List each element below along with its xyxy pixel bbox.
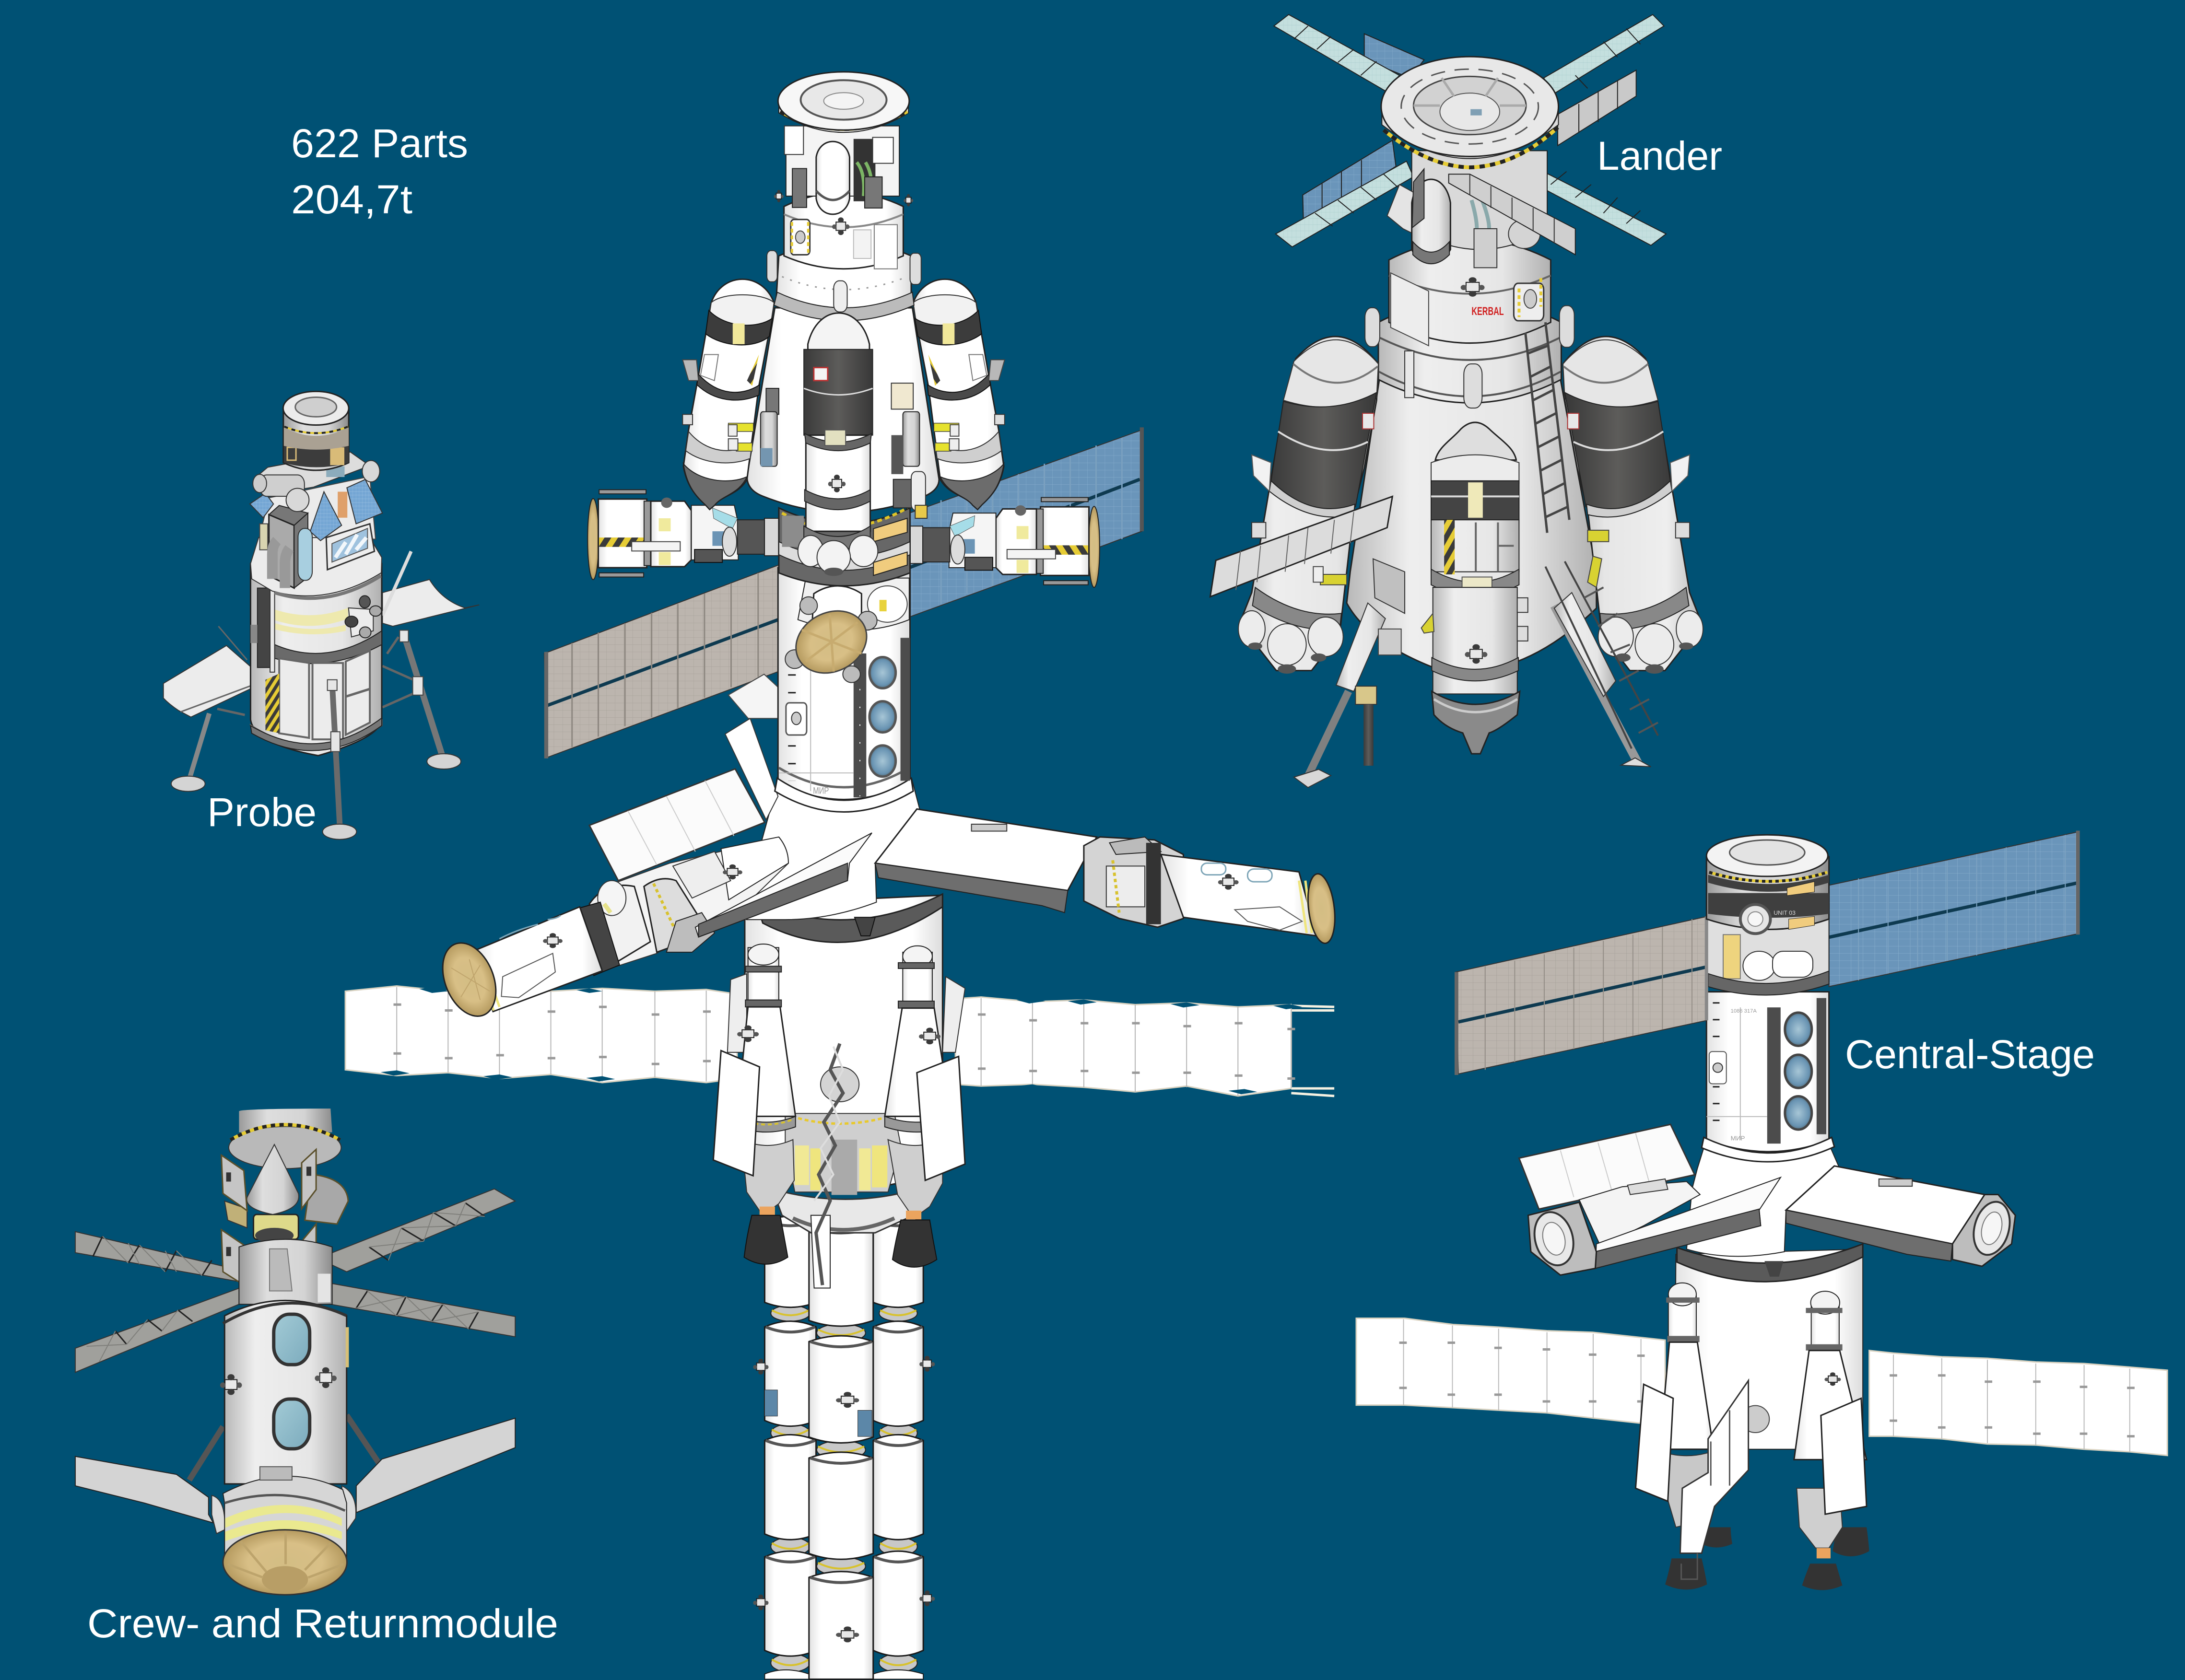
cone hull (1347, 374, 1597, 671)
gray folded panel (1210, 496, 1392, 597)
central column: МИР (1731, 1135, 1745, 1142)
side docking port (1741, 1406, 1769, 1433)
upper stack (224, 1108, 348, 1243)
side panel left (713, 1050, 760, 1176)
dark collar ring (756, 894, 942, 942)
truss with spheres (253, 452, 380, 512)
propulsion bay with yellow tanks (773, 1113, 917, 1233)
central docking port (821, 1067, 859, 1102)
top disc (1706, 835, 1828, 876)
upper banded ring: UNIT 03 (1774, 910, 1796, 916)
left landing-leg piston (761, 388, 779, 467)
teal X arrays (1274, 14, 1666, 247)
white solar array right (1869, 1351, 2167, 1456)
front leg (323, 680, 356, 840)
upper ladder (1526, 322, 1569, 533)
central column: МИР (813, 785, 829, 796)
solar array: white left (345, 986, 737, 1083)
rear pod behind column (728, 674, 778, 718)
solar array: white right (955, 997, 1334, 1096)
side brackets behind boosters (728, 974, 965, 1052)
tapered mid hull (747, 308, 939, 513)
booster left (737, 944, 796, 1264)
booster right (1794, 1291, 1867, 1590)
right outer tank (1563, 337, 1703, 674)
lower ring (767, 242, 921, 321)
left solar wing (164, 626, 279, 717)
lower body cylinder (745, 895, 942, 1189)
lander vehicle (1210, 14, 1703, 788)
rear legs (171, 630, 461, 792)
central stage vehicle (1356, 831, 2167, 1590)
bay with spheres (1706, 916, 1829, 1020)
neck (239, 1239, 332, 1304)
front gray panel (1449, 174, 1575, 255)
aft collar with heat shield (211, 1467, 356, 1595)
left folded panel (589, 769, 764, 881)
strut behind column (725, 718, 778, 820)
booster right (885, 946, 951, 1267)
brackets (222, 1149, 316, 1287)
upper ring with logo (1389, 239, 1551, 346)
main body (250, 563, 382, 756)
lower ladder and strut (1545, 561, 1658, 767)
top docking disc (1381, 57, 1559, 167)
left outer tank (682, 279, 774, 510)
RCS block (345, 595, 382, 638)
center tank with dark band (798, 313, 878, 576)
service ring with gold bays (779, 508, 910, 586)
rear engines (1702, 1527, 1869, 1556)
solar array: blue right (909, 427, 1144, 617)
upper banded ring (1706, 857, 1829, 933)
right solar wing (382, 551, 479, 626)
upper ring with logo: KERBAL (1471, 305, 1504, 318)
full vehicle: lower section with arms, arrays and fuel stack (345, 769, 1338, 1679)
text: part count: 622 Parts (291, 121, 468, 166)
label: Crew- and Returnmodule: Crew- and Returnmodule (87, 1601, 558, 1646)
collar bell (855, 917, 875, 936)
lower body (1675, 1249, 1863, 1449)
right wing plate (875, 809, 1097, 913)
left arm, open panel (1519, 1124, 1781, 1275)
right wing (356, 1418, 515, 1513)
folded panel group (1635, 1381, 1867, 1579)
center tank (1431, 422, 1520, 754)
collar bell (1764, 1261, 1783, 1277)
lower ring (1365, 299, 1574, 408)
booster left (1660, 1283, 1714, 1589)
left wing (75, 1457, 213, 1523)
left leg assembly (1294, 559, 1405, 788)
folded ladder (811, 1044, 843, 1288)
right landing-leg piston (892, 383, 927, 518)
central column (1702, 992, 1834, 1162)
central T hub (747, 779, 920, 920)
side thrusters on hull (1313, 530, 1609, 641)
central column (775, 568, 913, 812)
heat shield disc (791, 603, 871, 681)
left outer tank (1238, 337, 1378, 674)
solar fan panels (250, 479, 382, 541)
equipment bay (1387, 151, 1547, 268)
label: Lander: Lander (1597, 133, 1722, 178)
X arrays (75, 1189, 515, 1372)
full vehicle: upper section with hub, tanks and central column (544, 72, 1144, 820)
label: Probe: Probe (207, 790, 317, 835)
hull with windows (220, 1300, 349, 1484)
T hub (1687, 1148, 1840, 1256)
struts (189, 1415, 379, 1480)
deck top (250, 477, 382, 598)
window section behind heat shield (785, 578, 909, 683)
probe vehicle (164, 391, 479, 840)
equipment bay (785, 126, 899, 214)
solar array: gray left (544, 562, 785, 758)
radiator block (269, 505, 312, 588)
head module (283, 391, 349, 470)
white solar array left (1356, 1318, 1665, 1426)
top docking disc (778, 72, 909, 132)
right arm, closed panel (1786, 1166, 2015, 1266)
crew and return module vehicle (75, 1108, 515, 1595)
text: mass: 204,7t (291, 177, 412, 222)
central column: 1086 317A (1731, 1008, 1757, 1014)
label: Central-Stage: Central-Stage (1845, 1032, 2095, 1077)
fuel tank stack (753, 1216, 935, 1679)
left side-arm module (587, 490, 779, 580)
rear solar arrays (1303, 34, 1636, 223)
solar array: gray left (1455, 916, 1707, 1075)
left arm with crew module (433, 833, 872, 1022)
side panel right (917, 1056, 965, 1180)
right outer tank (913, 279, 1005, 510)
right arm with crew module (1084, 837, 1338, 945)
upper ring with hatch (774, 190, 913, 269)
dark collar (1677, 1244, 1863, 1282)
right side-arm module (908, 498, 1100, 587)
solar array: blue right (1829, 831, 2080, 987)
